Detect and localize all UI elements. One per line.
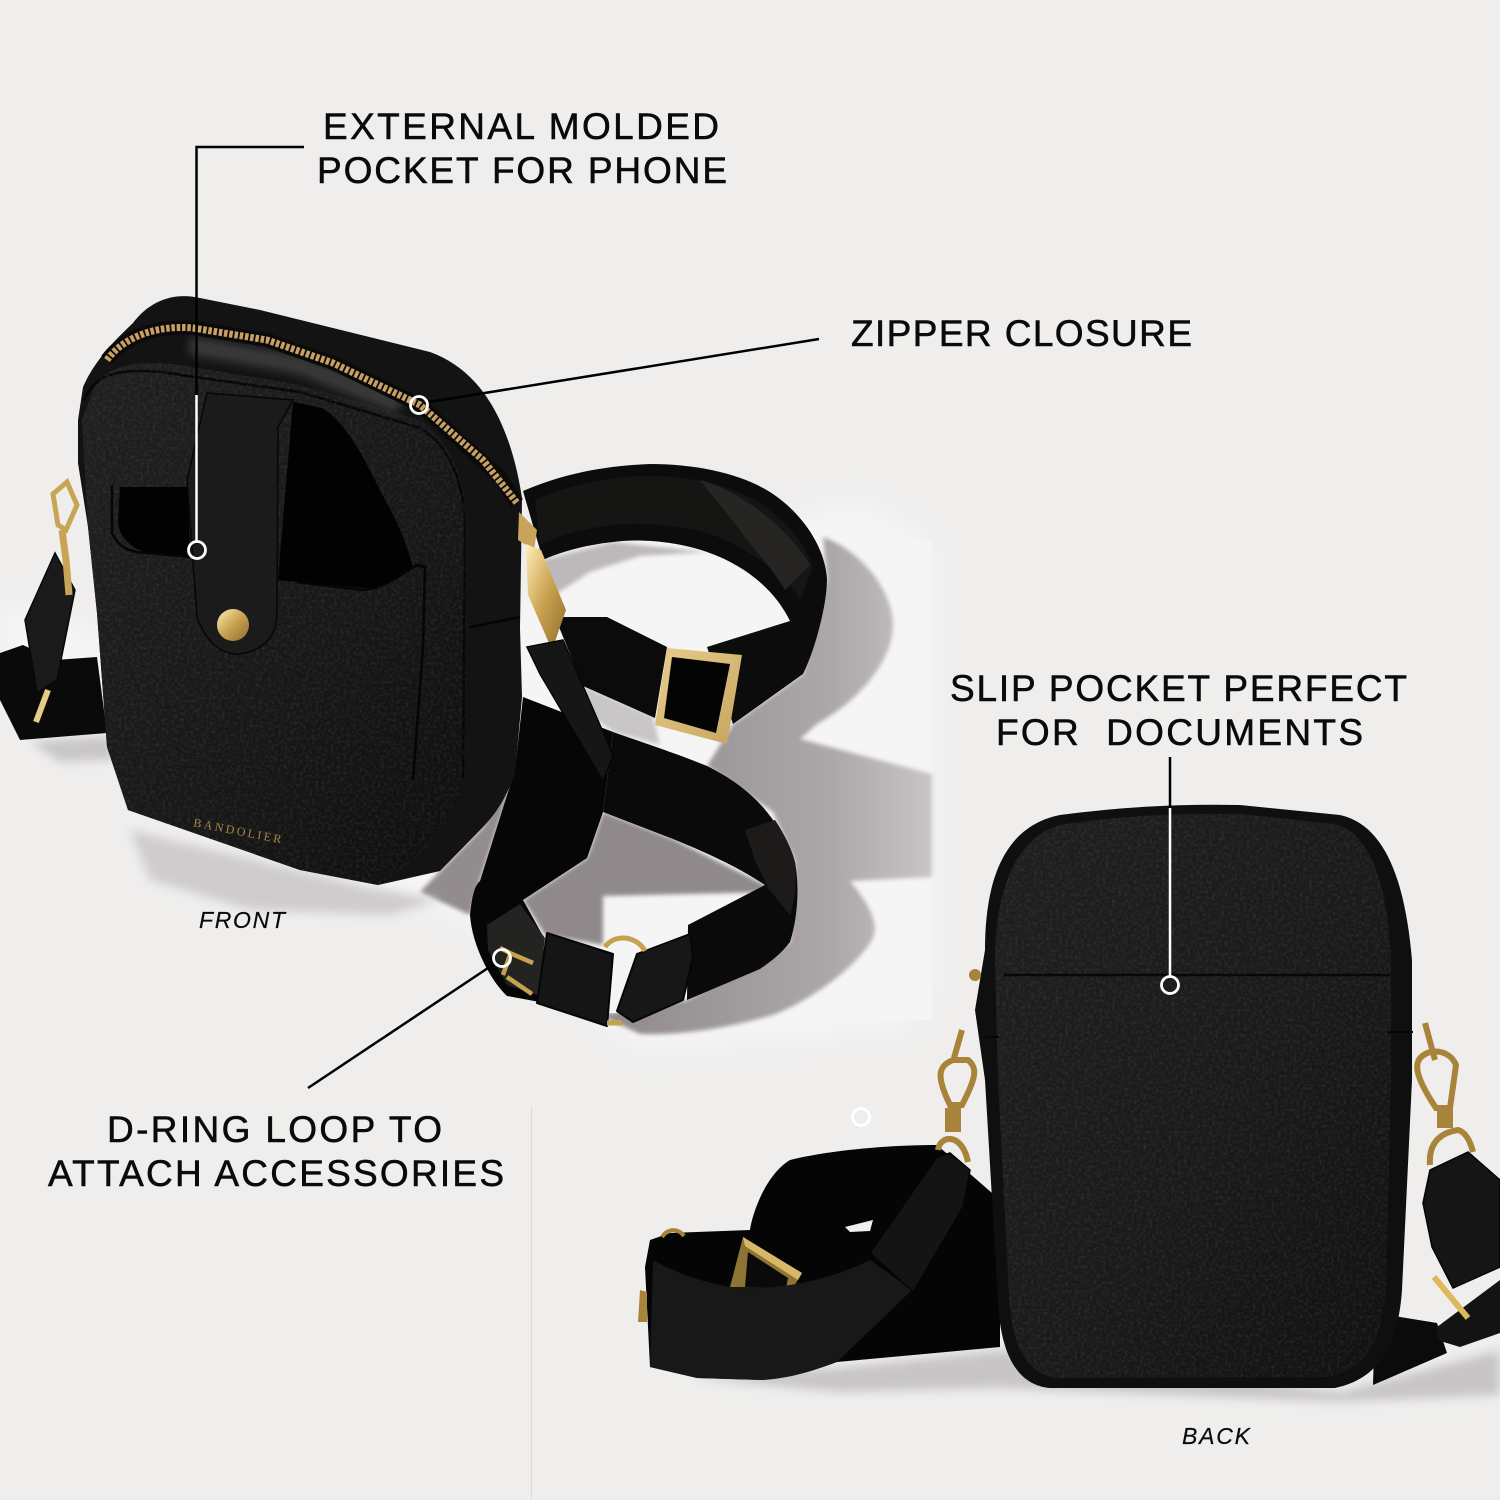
bag outer shell bbox=[78, 296, 522, 885]
callout: slip pocket bbox=[950, 668, 1407, 994]
strap: upper loop inner weave bbox=[535, 476, 812, 600]
back body outer bbox=[975, 805, 1412, 1388]
back slip pocket edge bbox=[1004, 974, 1390, 976]
callout: zipper closure: ZIPPER CLOSURE bbox=[851, 313, 1192, 354]
pocket cavity bbox=[118, 402, 413, 588]
right leather tab bbox=[1423, 1152, 1500, 1288]
strap tab left bbox=[537, 933, 613, 1026]
caption: front: FRONT bbox=[199, 907, 287, 933]
pocket flap bbox=[187, 393, 293, 654]
strap tab right bbox=[617, 934, 693, 1022]
callout: D-ring loop: D-RING LOOP TO bbox=[107, 1109, 442, 1150]
callout: D-ring loop: ATTACH ACCESSORIES bbox=[48, 1153, 504, 1194]
callout: slip pocket: FOR DOCUMENTS bbox=[996, 712, 1363, 753]
strap: upper loop bbox=[523, 464, 827, 724]
back bag ground shadow bbox=[690, 1350, 1500, 1402]
back body panel bbox=[995, 814, 1391, 1378]
hardware left bbox=[638, 1290, 647, 1322]
icon: right back clasp bbox=[1417, 1023, 1473, 1318]
left leather tab bbox=[870, 1153, 970, 1292]
icon: tab rings bbox=[605, 938, 645, 1023]
callout: external molded pocket bbox=[188, 106, 727, 558]
zipper teeth bbox=[107, 327, 517, 503]
decorative seam bbox=[531, 1107, 532, 1500]
front webbing bbox=[650, 1260, 912, 1380]
callout: external molded pocket: POCKET FOR PHONE bbox=[317, 150, 727, 191]
brand: BANDOLIER bbox=[192, 815, 285, 847]
left strap webbing bbox=[0, 645, 107, 740]
strap: section left of buckle bbox=[555, 617, 667, 718]
front photo lighter backdrop bbox=[0, 500, 932, 1050]
white gap between strap tabs bbox=[609, 961, 630, 1013]
icon: D-ring bbox=[500, 948, 533, 994]
pocket edge bbox=[112, 485, 425, 780]
caption: back: BACK bbox=[1182, 1423, 1252, 1449]
left leather tab bbox=[25, 553, 75, 693]
icon: zip pull bbox=[518, 512, 613, 781]
strap: descending to D-ring bbox=[470, 697, 613, 1003]
icon: left back clasp bbox=[938, 1030, 974, 1162]
panel seam bbox=[84, 371, 465, 780]
callout: slip pocket: SLIP POCKET PERFECT bbox=[950, 668, 1407, 709]
strap: lower sweep bbox=[603, 732, 797, 1000]
cast shadows bbox=[30, 537, 932, 1034]
back bag illustration bbox=[638, 805, 1500, 1402]
small gap in strap bbox=[845, 1220, 873, 1232]
bag side stitching bbox=[470, 617, 520, 627]
zipper tape bbox=[107, 327, 517, 503]
right webbing bbox=[1373, 1313, 1447, 1385]
side gold snap bbox=[969, 969, 981, 981]
icon: strap adjuster buckle bbox=[655, 648, 742, 744]
leather grain front bbox=[82, 363, 467, 885]
icon: gold snap bbox=[217, 609, 249, 641]
callout: external molded pocket: EXTERNAL MOLDED bbox=[323, 106, 719, 147]
icon: left clasp bbox=[53, 482, 77, 595]
front bag illustration bbox=[0, 296, 932, 1034]
side seam notches bbox=[985, 1032, 1413, 1037]
callout: D-ring loop bbox=[48, 950, 510, 1194]
bag front panel bbox=[82, 363, 467, 885]
leather highlight below zipper bbox=[190, 345, 400, 405]
callout: zipper closure bbox=[410, 313, 1192, 414]
stray marker ring bbox=[852, 1108, 870, 1126]
icon: back buckle bbox=[730, 1237, 802, 1288]
leather grain back bbox=[995, 814, 1391, 1378]
rear strap mass bbox=[645, 1145, 1000, 1380]
right leather tube bbox=[1437, 1280, 1500, 1347]
